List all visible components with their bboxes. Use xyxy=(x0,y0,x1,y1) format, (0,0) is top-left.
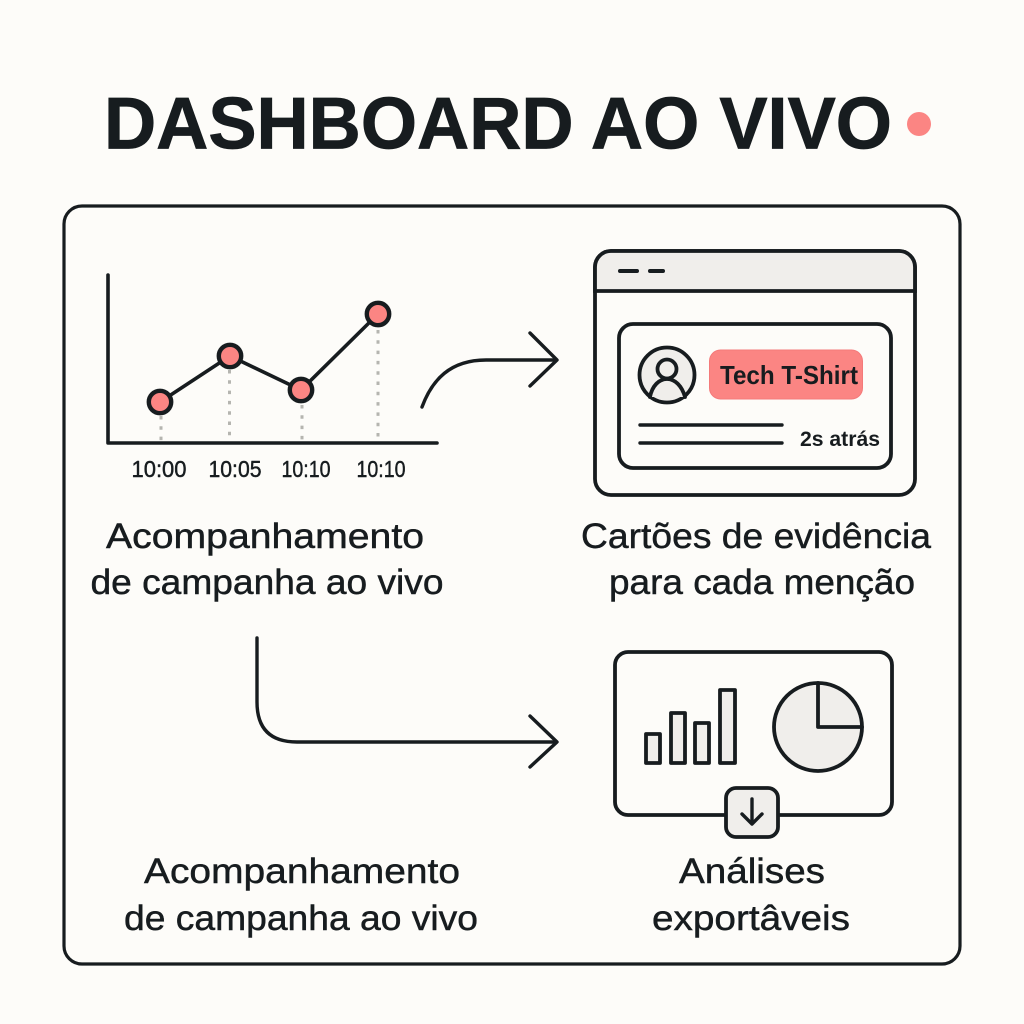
text: live campaign tracking, top second line: de campanha ao vivo xyxy=(90,563,444,602)
icon: browser window with evidence card: 2s atrás xyxy=(800,428,880,451)
arrow: tracking to exportable analytics xyxy=(257,638,557,767)
text: evidence cards, second line: para cada menção xyxy=(609,563,915,602)
line chart xyxy=(108,275,437,482)
line chart: 10:00 xyxy=(132,456,186,482)
panel: main frame xyxy=(64,206,960,964)
title: DASHBOARD AO VIVO xyxy=(104,84,892,164)
text: exportable analytics, second line: exportâveis xyxy=(652,899,850,938)
text: exportable analytics, first line: Análises xyxy=(679,852,825,891)
text: live campaign tracking, bottom: Acompanhamento xyxy=(144,852,460,891)
icon: browser window with evidence card xyxy=(595,251,915,495)
line chart: 10:10 xyxy=(282,456,330,482)
text: evidence cards, first line: Cartões de evidência xyxy=(581,517,932,556)
text: live campaign tracking, top: Acompanhamento xyxy=(106,517,424,556)
icon: browser window with evidence card: Tech T-Shirt xyxy=(720,360,858,390)
line chart: 10:05 xyxy=(208,456,262,482)
text: live campaign tracking, bottom second line: de campanha ao vivo xyxy=(124,899,478,938)
line chart: 10:10 xyxy=(356,456,406,482)
icon: analytics screen with download xyxy=(615,652,892,837)
arrow: chart to evidence card xyxy=(422,333,557,407)
